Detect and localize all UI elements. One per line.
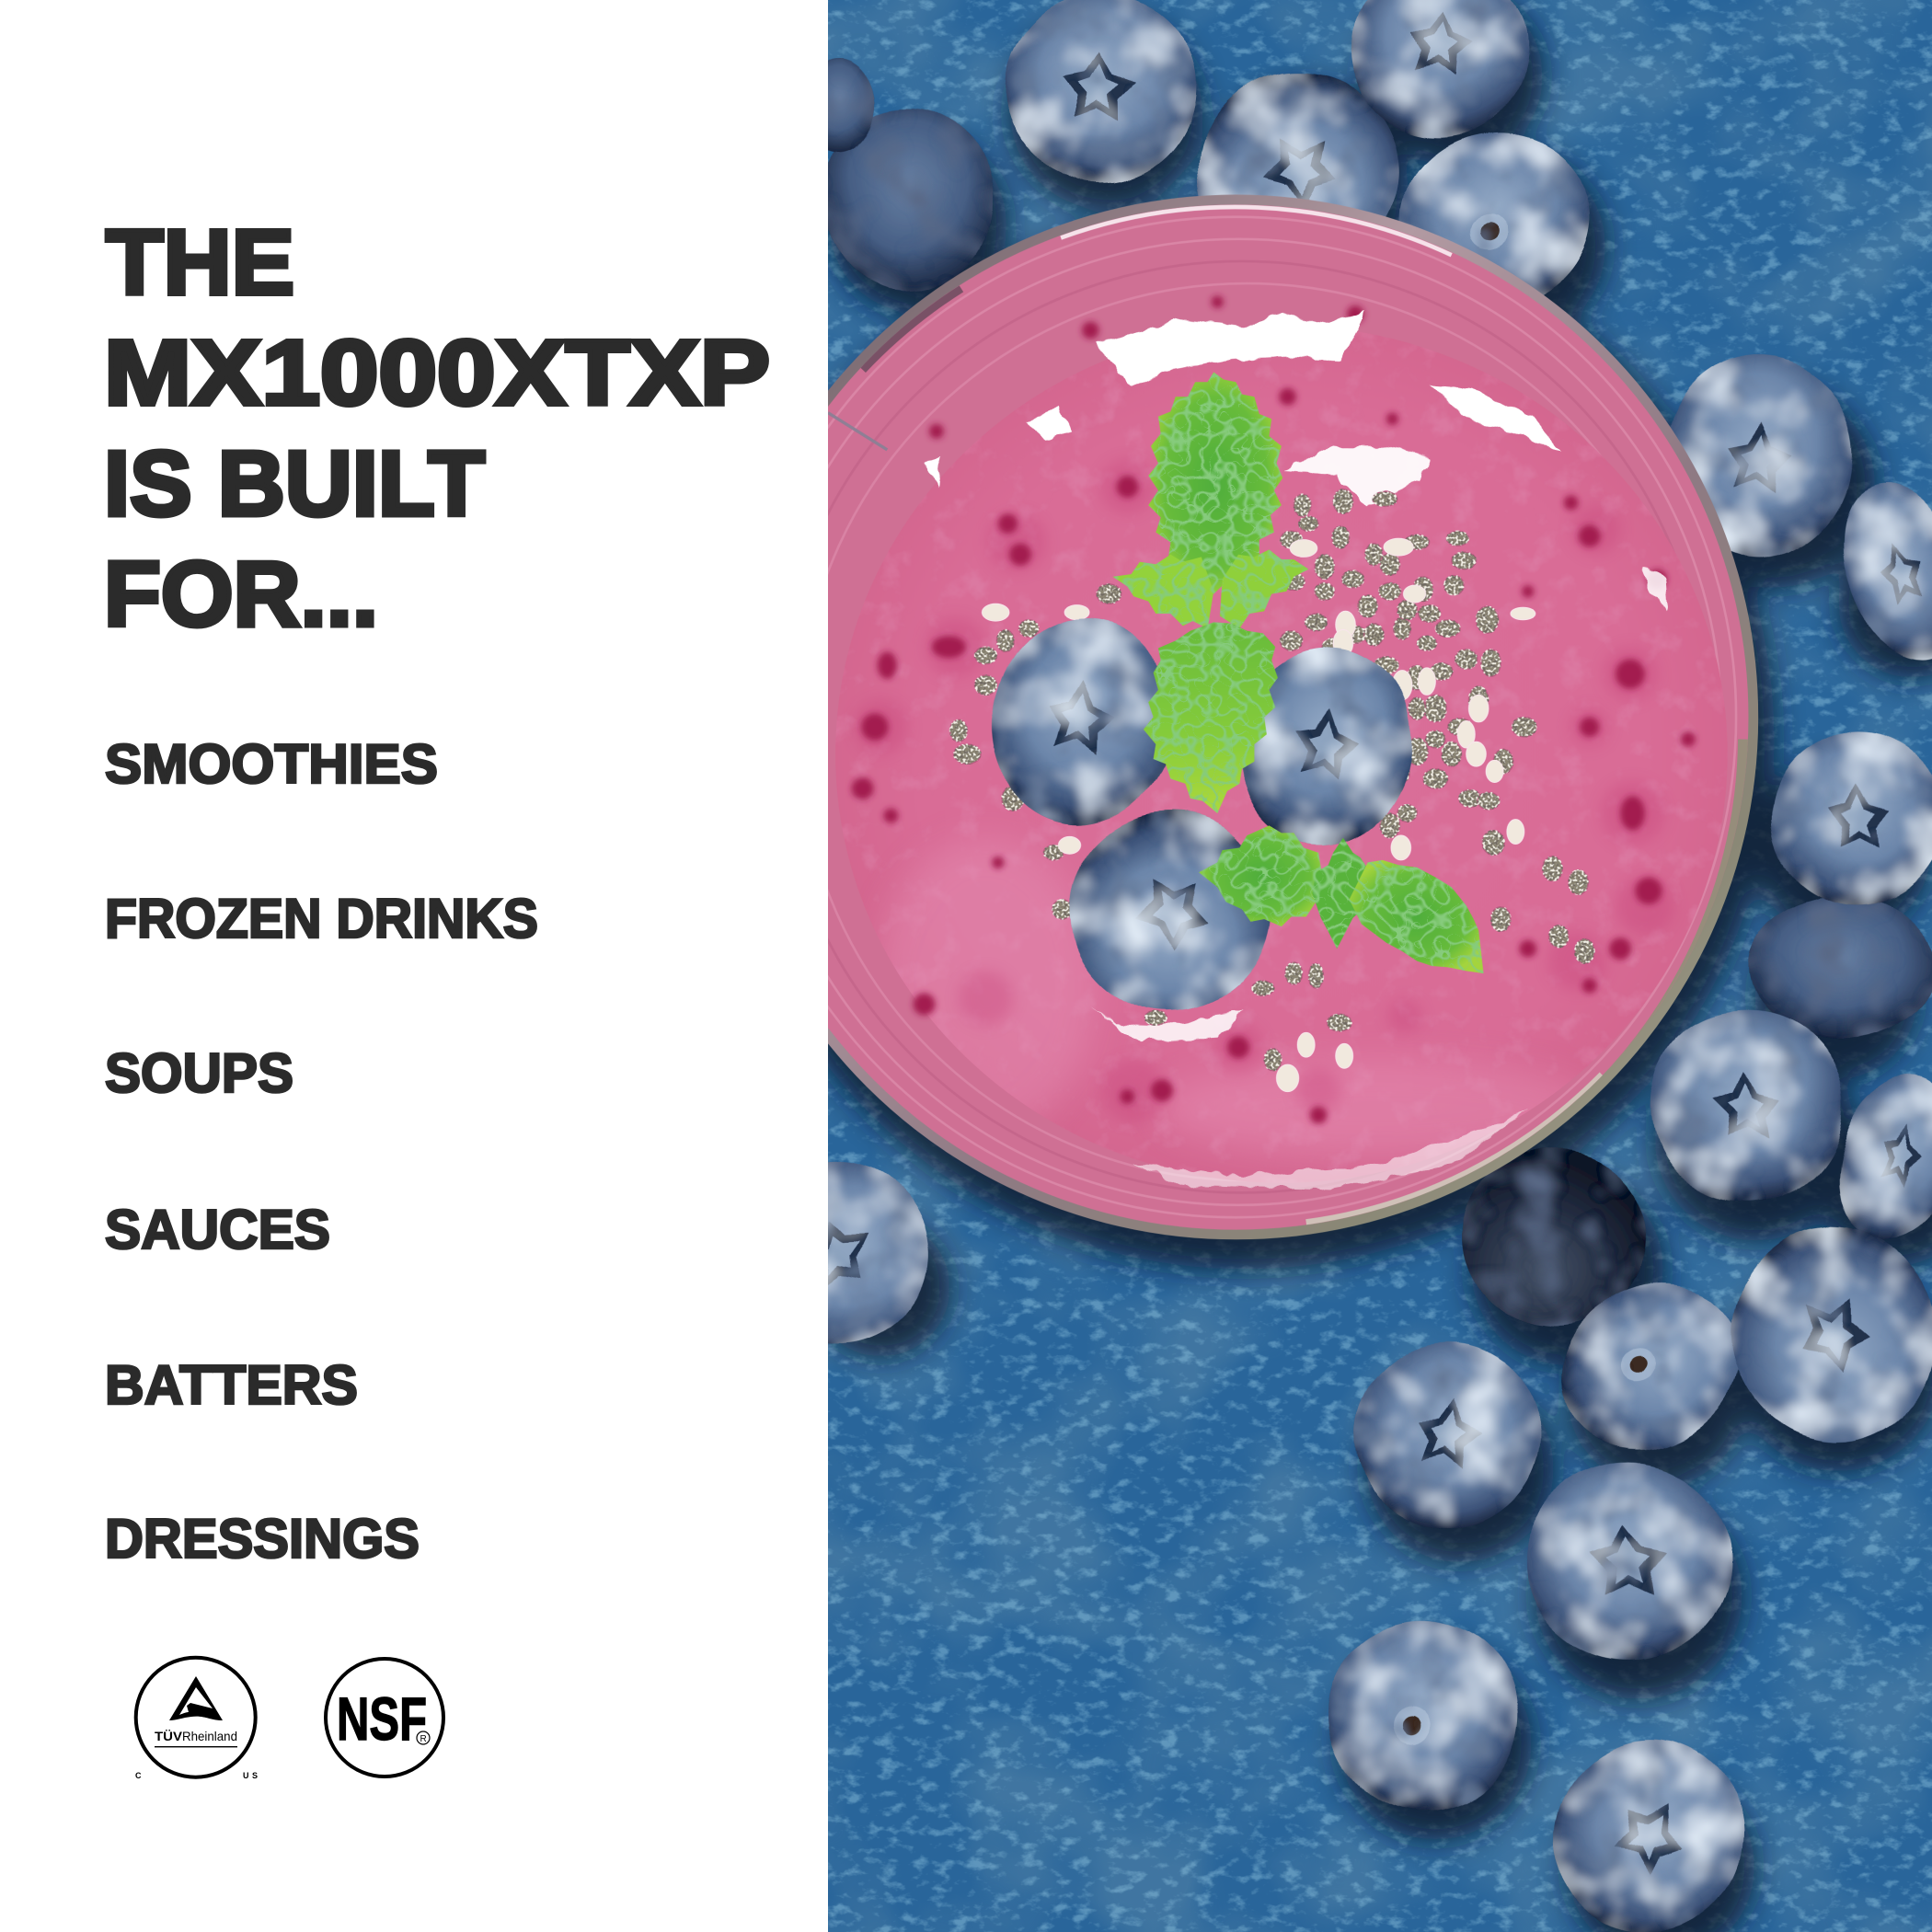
photo: mint sprig top [1112,372,1308,813]
mint: upper leaf [1148,372,1282,594]
icon: NSF certification mark [326,1659,443,1777]
icon: TUV Rheinland certification mark: US [243,1771,258,1780]
photo: mint sprig bottom [1199,825,1484,973]
photo panel: blueberry smoothie [713,0,1932,1932]
icon: NSF certification mark: R [420,1734,427,1744]
icon: TUV Rheinland certification mark: TÜV [155,1729,183,1743]
photo: glass rim [719,200,1754,1235]
photo: white chia seeds [982,538,1535,1092]
title: FOR... [104,543,378,646]
title [104,212,770,646]
mint: left side leaf [1112,555,1213,628]
photo: blue textured background [828,0,1932,1932]
photo: raspberry flecks [851,295,1696,1123]
photo: glossy highlights [924,313,1666,1189]
use: smoothies: SMOOTHIES [105,733,438,795]
use: dressings: DRESSINGS [105,1508,420,1570]
title: MX1000XTXP [104,322,770,425]
photo: chia seeds [950,489,1594,1071]
photo: loose blueberries [713,0,1932,1932]
photo: shaded blueberries [803,55,1932,1327]
photo: berry shadows [715,0,1932,1932]
use: batters: BATTERS [105,1354,358,1416]
panel: white text column [0,0,828,1932]
use: sauces: SAUCES [105,1199,330,1260]
use: soups: SOUPS [105,1042,293,1104]
use: frozen drinks: FROZEN DRINKS [105,888,538,949]
photo: smoothie surface [828,320,1740,1195]
mint: lower leaf [1144,622,1278,813]
title: IS BUILT [104,432,485,535]
icon: TUV Rheinland certification mark: C [135,1771,142,1780]
icon: TUV Rheinland certification mark: Rheinland [182,1729,237,1743]
icon: TUV Rheinland certification mark [135,1658,258,1780]
mint: bottom left leaf [1199,825,1325,926]
title: THE [106,212,294,315]
mint: right side leaf [1220,549,1308,628]
mint: bottom center leaf [1312,838,1373,949]
list of uses [105,733,538,1570]
photo: blueberries on smoothie [982,610,1424,1010]
icon: NSF certification mark: NSF [337,1685,427,1753]
mint: bottom right leaf [1350,860,1484,973]
